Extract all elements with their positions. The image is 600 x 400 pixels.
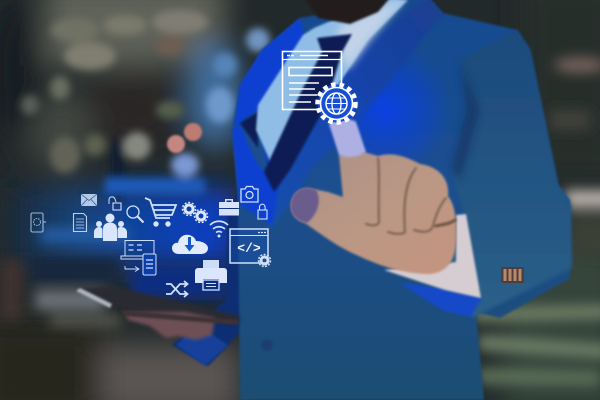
icon: wifi bbox=[210, 221, 228, 238]
icon: browser window bbox=[282, 52, 342, 110]
icon: briefcase bbox=[219, 199, 239, 216]
icon: open padlock bbox=[109, 197, 121, 210]
icon: globe gear bbox=[318, 84, 356, 122]
cuff lining bbox=[400, 283, 482, 317]
icon: shopping cart bbox=[145, 198, 176, 227]
chest glow bbox=[317, 42, 453, 178]
left sleeve bbox=[172, 200, 242, 366]
right sleeve bbox=[440, 30, 572, 318]
necktie bbox=[264, 34, 352, 192]
icon: cloud download bbox=[172, 235, 208, 254]
icon: phone settings bbox=[31, 213, 46, 232]
fingertip bbox=[329, 119, 366, 157]
shirt cuff bbox=[384, 214, 481, 298]
pointing hand bbox=[291, 119, 456, 274]
shirt and collar bbox=[256, 0, 408, 165]
thumb tip bbox=[291, 188, 319, 223]
icon: magnifier bbox=[127, 206, 144, 222]
icon: envelope bbox=[81, 194, 97, 206]
left lapel bbox=[232, 18, 305, 225]
icon group: scattered services bbox=[31, 186, 270, 297]
finger shadows bbox=[366, 158, 455, 234]
icon: team of people bbox=[94, 214, 127, 241]
code symbol: </> bbox=[237, 241, 261, 256]
icon: camera bbox=[241, 186, 258, 202]
icon: laptop and tablet bbox=[121, 240, 156, 275]
icon group: main web settings bbox=[282, 52, 356, 122]
right lapel bbox=[262, 0, 442, 230]
icon: printer bbox=[195, 260, 227, 290]
lapel notch bbox=[240, 112, 258, 148]
icon: gears bbox=[182, 202, 208, 222]
beard bbox=[305, 0, 390, 24]
button bbox=[261, 339, 273, 351]
icon: shuffle arrows bbox=[166, 281, 188, 297]
sleeve buttons bbox=[501, 267, 524, 283]
icon: document bbox=[74, 214, 86, 232]
icon: code window bbox=[230, 229, 270, 266]
suit jacket bbox=[172, 0, 572, 400]
phone and lower hand bbox=[76, 286, 240, 340]
icon: closed padlock bbox=[258, 204, 267, 219]
